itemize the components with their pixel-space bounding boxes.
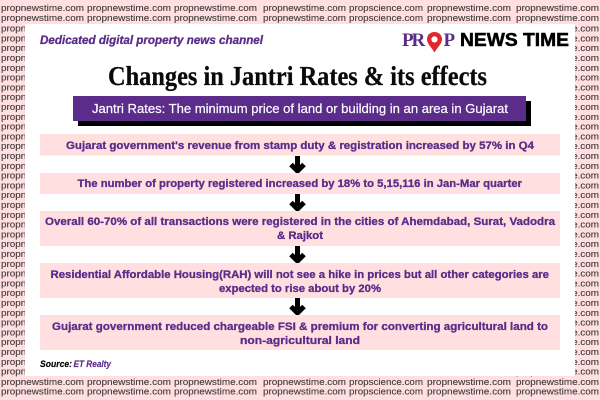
watermark: top rows <box>1 3 599 24</box>
watermark: left column: propnewstime.com <box>1 161 84 172</box>
watermark: bottom rows: propnewstime.com <box>87 386 171 398</box>
watermark: left column: propnewstime.com <box>1 229 84 240</box>
watermark: right column: propnewstime.com <box>516 171 599 182</box>
watermark: left column: propnewstime.com <box>1 33 84 44</box>
fact box 5 <box>40 315 560 350</box>
watermark: right column: propnewstime.com <box>516 92 599 103</box>
watermark: bottom rows: propscience.com <box>349 377 423 388</box>
watermark: left column: propnewstime.com <box>1 269 84 280</box>
watermark: top rows: propnewstime.com <box>174 3 257 14</box>
source note: Source: <box>40 359 72 369</box>
watermark: bottom rows <box>1 377 599 398</box>
watermark: right column: propnewstime.com <box>516 318 599 329</box>
logo wordmark: PROP: PROP <box>402 30 456 51</box>
watermark: right column: propnewstime.com <box>516 269 599 280</box>
watermark: right column: propnewstime.com <box>516 141 599 152</box>
watermark: top rows: propscience.com <box>349 13 423 24</box>
watermark: left column: propnewstime.com <box>1 200 84 211</box>
watermark: left column: propnewstime.com <box>1 24 84 35</box>
fact box 4: expected to rise about by 20% <box>219 283 381 295</box>
watermark: right column: propnewstime.com <box>516 102 599 113</box>
watermark: bottom rows: propnewstime.com <box>263 377 346 388</box>
watermark: top rows: propnewstime.com <box>174 13 257 24</box>
banner text: Jantri Rates: The minimum price of land or building in an area in Gujarat <box>92 101 508 116</box>
fact box 2: The number of property registered increased by 18% to 5,15,116 in Jan-Mar quarter <box>78 178 523 190</box>
watermark: bottom rows: propnewstime.com <box>263 386 346 398</box>
watermark: left column: propnewstime.com <box>1 141 84 152</box>
arrow 4 <box>291 298 304 313</box>
watermark: left column: propnewstime.com <box>1 210 84 221</box>
watermark: right column: propnewstime.com <box>516 131 599 142</box>
watermark: right column: propnewstime.com <box>516 122 599 133</box>
watermark: left column: propnewstime.com <box>1 249 84 260</box>
watermark: right column: propnewstime.com <box>516 367 599 378</box>
watermark: right column: propnewstime.com <box>516 327 599 338</box>
watermark: right column: propnewstime.com <box>516 357 599 368</box>
watermark: bottom rows: propnewstime.com <box>427 377 511 388</box>
arrow 2 <box>291 194 304 209</box>
watermark: right column: propnewstime.com <box>516 288 599 299</box>
watermark: bottom rows: propnewstime.com <box>516 386 599 398</box>
watermark: left column: propnewstime.com <box>1 63 84 74</box>
watermark: right column: propnewstime.com <box>516 33 599 44</box>
fact box 4: Residential Affordable Housing(RAH) will not see a hike in prices but all other categories are <box>50 269 549 281</box>
watermark: right column: propnewstime.com <box>516 112 599 123</box>
watermark: left column: propnewstime.com <box>1 131 84 142</box>
watermark: top rows: propnewstime.com <box>87 3 171 14</box>
watermark: top rows: propnewstime.com <box>516 3 599 14</box>
fact box 3: & Rajkot <box>277 230 323 242</box>
watermark: left column: propnewstime.com <box>1 308 84 319</box>
fact box 5: Gujarat government reduced chargeable FSI & premium for converting agricultural land to <box>52 321 548 333</box>
watermark: right column: propnewstime.com <box>516 249 599 260</box>
watermark: right column: propnewstime.com <box>516 151 599 162</box>
watermark: left column: propnewstime.com <box>1 337 84 348</box>
watermark: left column: propnewstime.com <box>1 367 84 378</box>
banner shadow <box>78 101 531 126</box>
watermark: right column: propnewstime.com <box>516 239 599 250</box>
watermark: right column: propnewstime.com <box>516 190 599 201</box>
watermark: top rows: propnewstime.com <box>263 3 346 14</box>
watermark: left column: propnewstime.com <box>1 220 84 231</box>
source note <box>40 359 112 369</box>
tagline: Dedicated digital property news channel <box>40 35 264 47</box>
watermark: left column: propnewstime.com <box>1 327 84 338</box>
watermark: left column: propnewstime.com <box>1 112 84 123</box>
watermark: left column: propnewstime.com <box>1 180 84 191</box>
fact box 3: Overall 60-70% of all transactions were registered in the cities of Ahemdabad, Surat, Vadodra <box>45 216 556 228</box>
watermark: bottom rows: propnewstime.com <box>87 377 171 388</box>
watermark: left column: propnewstime.com <box>1 190 84 201</box>
watermark: right column <box>516 24 599 378</box>
watermark: top rows: propnewstime.com <box>87 13 171 24</box>
fact box 1 <box>40 134 560 156</box>
title: Changes in Jantri Rates & its effects <box>108 61 487 91</box>
watermark: right column: propnewstime.com <box>516 180 599 191</box>
banner fill <box>73 96 526 121</box>
watermark: right column: propnewstime.com <box>516 220 599 231</box>
watermark: left column: propnewstime.com <box>1 102 84 113</box>
watermark: right column: propnewstime.com <box>516 53 599 64</box>
watermark: right column: propnewstime.com <box>516 210 599 221</box>
fact box 5: non-agricultural land <box>240 335 360 347</box>
icon: red map pin <box>427 32 442 52</box>
watermark: right column: propnewstime.com <box>516 73 599 84</box>
watermark: bottom rows: propnewstime.com <box>1 377 84 388</box>
logo wordmark: NEWS TIME: NEWS TIME <box>460 30 569 50</box>
arrow 1 <box>291 156 304 171</box>
watermark: bottom rows: propscience.com <box>349 386 423 398</box>
watermark: left column: propnewstime.com <box>1 298 84 309</box>
watermark: top rows: propscience.com <box>349 3 423 14</box>
watermark: left column <box>1 24 84 378</box>
watermark: left column: propnewstime.com <box>1 73 84 84</box>
watermark: left column: propnewstime.com <box>1 259 84 270</box>
watermark: top rows: propnewstime.com <box>427 3 511 14</box>
watermark: bottom rows: propnewstime.com <box>174 386 257 398</box>
watermark: bottom rows: propnewstime.com <box>174 377 257 388</box>
watermark: right column: propnewstime.com <box>516 308 599 319</box>
watermark: left column: propnewstime.com <box>1 82 84 93</box>
watermark: left column: propnewstime.com <box>1 278 84 289</box>
watermark: right column: propnewstime.com <box>516 298 599 309</box>
watermark: right column: propnewstime.com <box>516 259 599 270</box>
watermark: left column: propnewstime.com <box>1 53 84 64</box>
watermark: top rows: propnewstime.com <box>516 13 599 24</box>
watermark: left column: propnewstime.com <box>1 122 84 133</box>
watermark: left column: propnewstime.com <box>1 151 84 162</box>
watermark: left column: propnewstime.com <box>1 357 84 368</box>
watermark: right column: propnewstime.com <box>516 161 599 172</box>
watermark: right column: propnewstime.com <box>516 200 599 211</box>
watermark: right column: propnewstime.com <box>516 229 599 240</box>
watermark: left column: propnewstime.com <box>1 347 84 358</box>
watermark: right column: propnewstime.com <box>516 337 599 348</box>
watermark: right column: propnewstime.com <box>516 24 599 35</box>
fact box 2 <box>40 173 560 194</box>
watermark: left column: propnewstime.com <box>1 318 84 329</box>
watermark: left column: propnewstime.com <box>1 92 84 103</box>
watermark: bottom rows: propnewstime.com <box>516 377 599 388</box>
watermark: top rows: propnewstime.com <box>1 3 84 14</box>
watermark: bottom rows: propnewstime.com <box>1 386 84 398</box>
watermark: right column: propnewstime.com <box>516 63 599 74</box>
watermark: left column: propnewstime.com <box>1 239 84 250</box>
source note: ET Realty <box>74 359 112 369</box>
fact box 1: Gujarat government's revenue from stamp duty & registration increased by 57% in Q4 <box>66 140 535 152</box>
watermark: right column: propnewstime.com <box>516 278 599 289</box>
watermark: left column: propnewstime.com <box>1 43 84 54</box>
watermark: left column: propnewstime.com <box>1 288 84 299</box>
fact box 4 <box>40 263 560 298</box>
logo: Prop News Time <box>402 30 569 52</box>
watermark: top rows: propnewstime.com <box>263 13 346 24</box>
watermark: left column: propnewstime.com <box>1 171 84 182</box>
fact box 3 <box>40 211 560 246</box>
watermark: right column: propnewstime.com <box>516 43 599 54</box>
watermark: right column: propnewstime.com <box>516 82 599 93</box>
watermark: right column: propnewstime.com <box>516 347 599 358</box>
watermark: top rows: propnewstime.com <box>427 13 511 24</box>
arrow 3 <box>291 246 304 261</box>
definition banner <box>73 96 531 126</box>
watermark: bottom rows: propnewstime.com <box>427 386 511 398</box>
watermark: top rows: propnewstime.com <box>1 13 84 24</box>
